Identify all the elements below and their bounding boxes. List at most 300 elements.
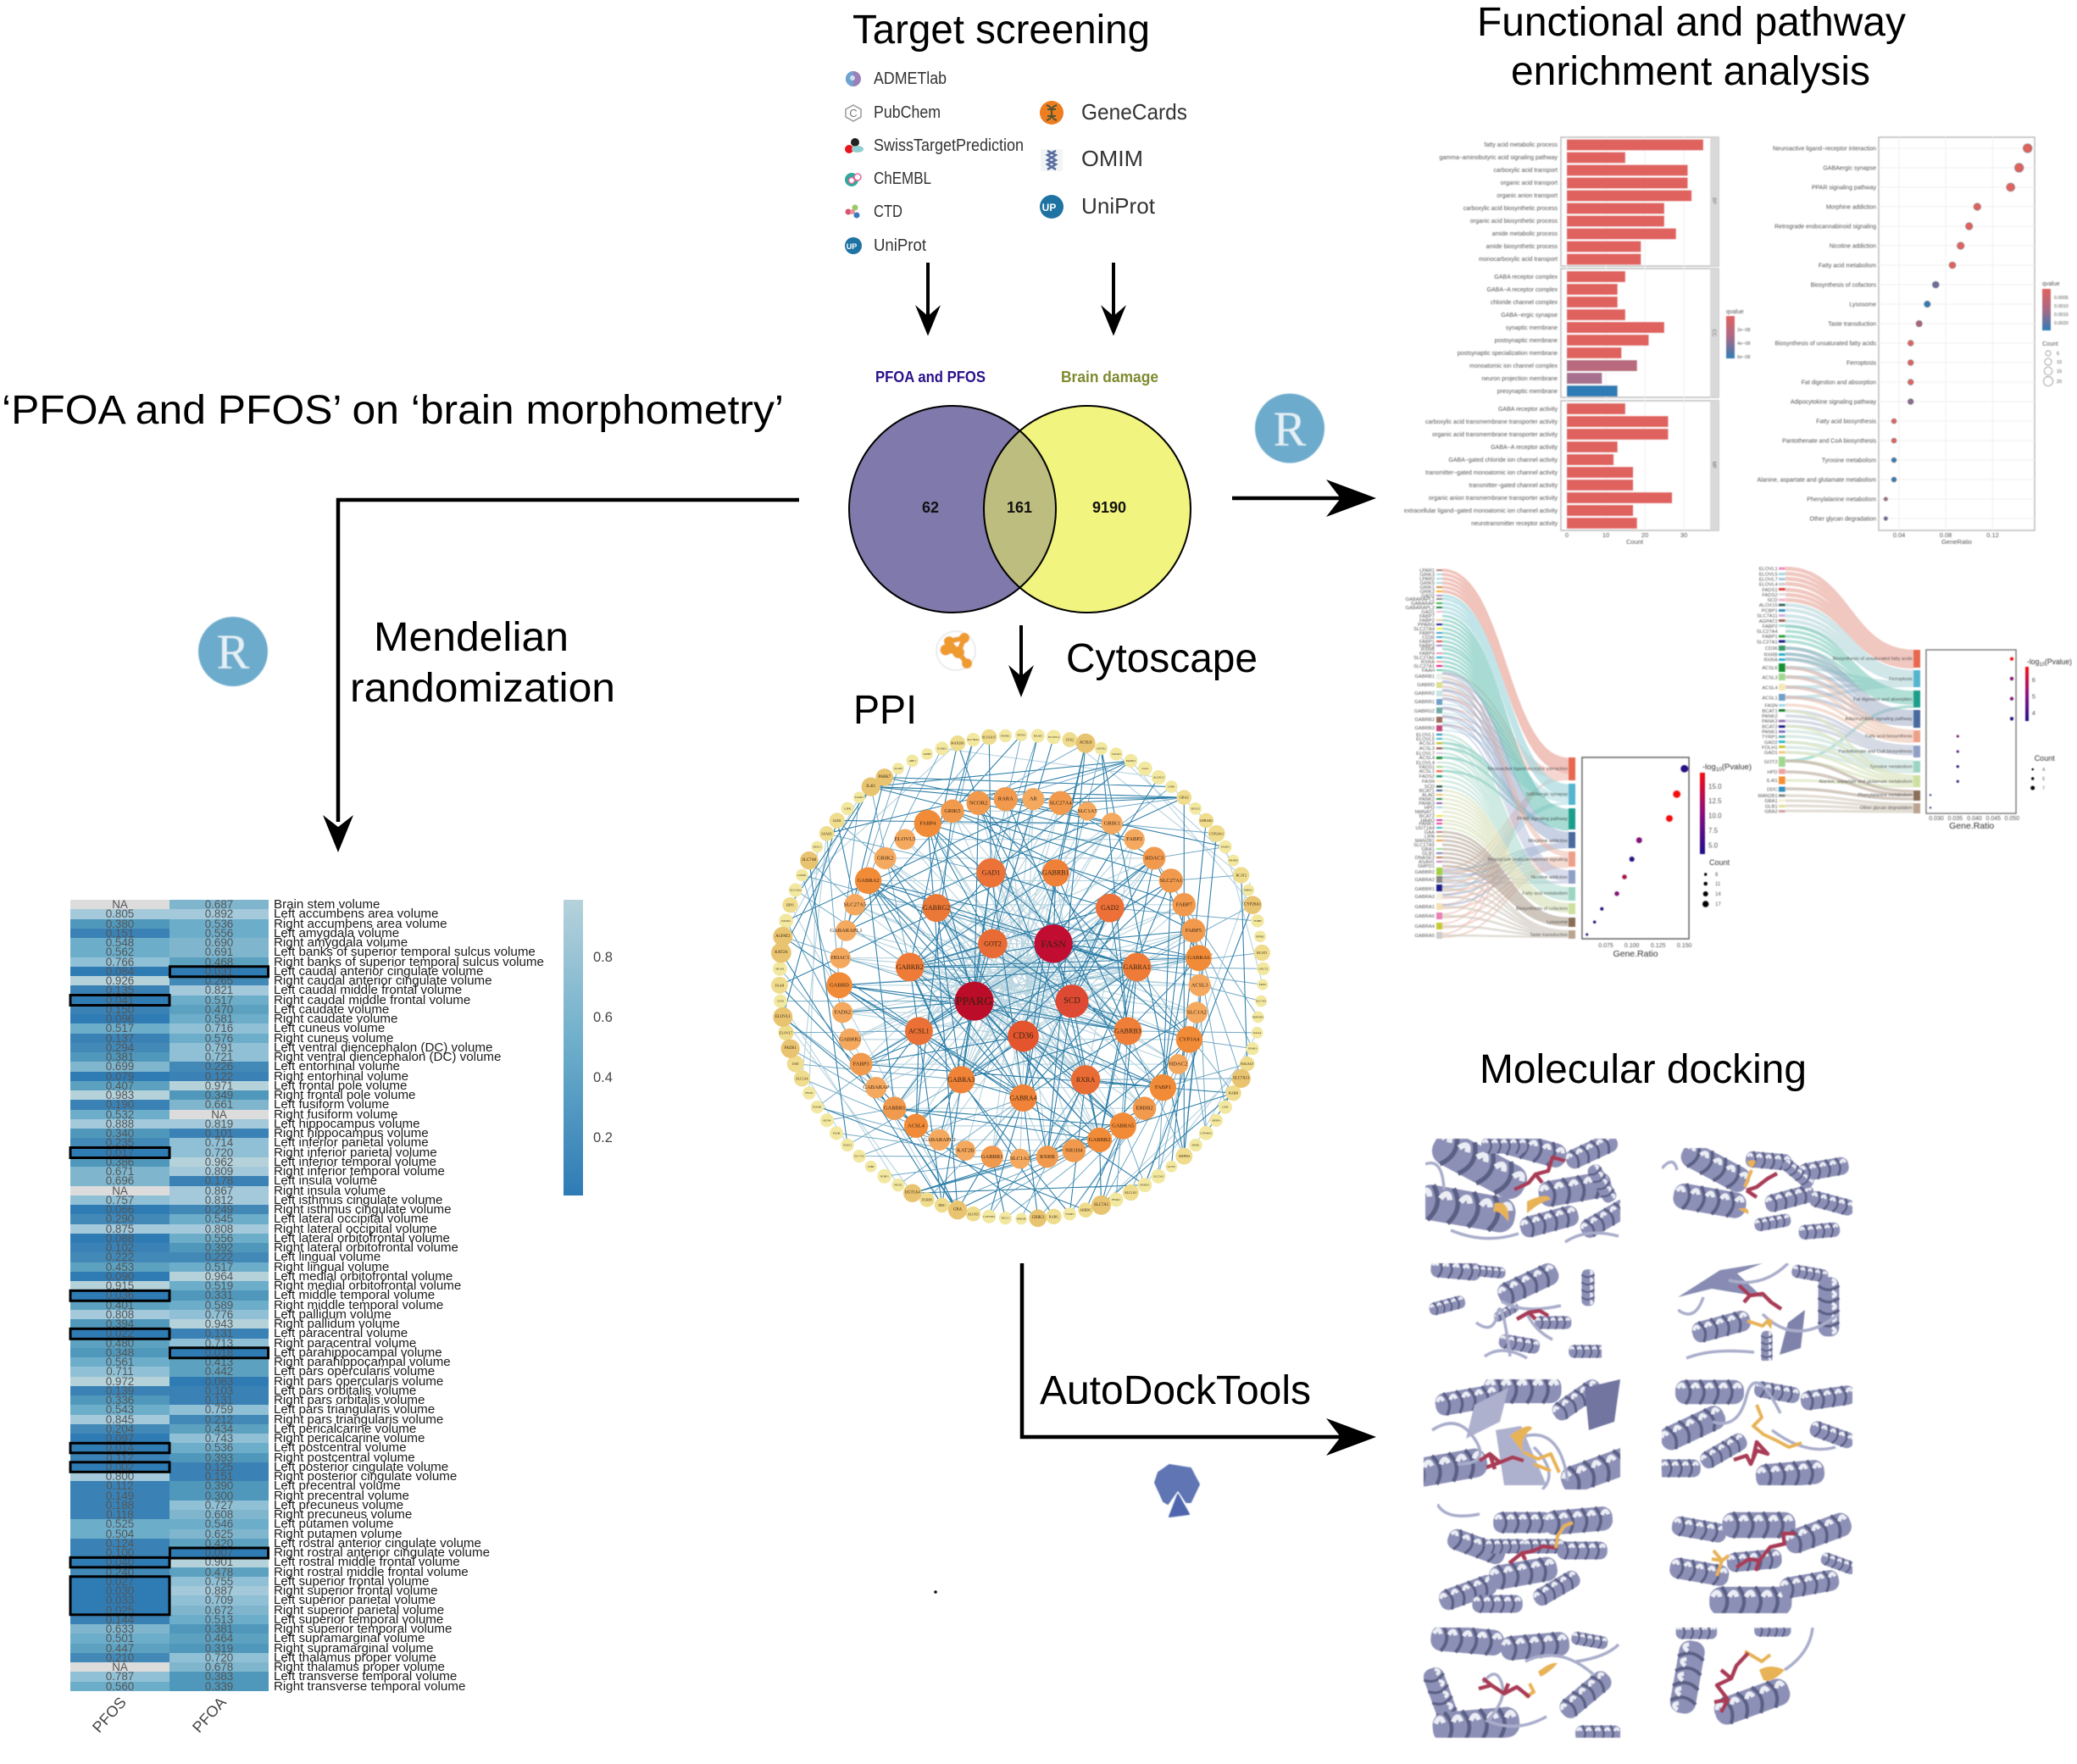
- panel: brain morphometry heatmap cells and region labels: Right medial orbitofrontal volume: [274, 1279, 461, 1293]
- sankey pathway nodes and labels: Morphine addiction: [1529, 839, 1568, 844]
- sankey gene nodes and labels: MAN2B1: [1758, 794, 1778, 799]
- panel: brain morphometry heatmap cells and region labels: 0.222: [205, 1251, 233, 1263]
- dot plot legend: -log10 Pvalue and count: 15.0: [1708, 783, 1722, 790]
- outer ring nodes small: BAAD: [1034, 734, 1042, 737]
- outer ring nodes small: PRPH2: [1229, 859, 1238, 863]
- icon: CTD: [846, 205, 859, 219]
- panel: brain morphometry heatmap cells and region labels: 0.713: [205, 1337, 233, 1349]
- venn counts: [922, 499, 1126, 516]
- panel: brain morphometry heatmap cells and region labels: Left parahippocampal volume: [274, 1345, 442, 1360]
- sankey gene nodes and labels: PANK2: [1419, 797, 1435, 802]
- sankey gene nodes and labels: GAD1: [1764, 751, 1778, 756]
- bar chart x axis: 0: [1565, 531, 1569, 539]
- panel: brain morphometry heatmap cells and region labels: Left cuneus volume: [274, 1021, 385, 1035]
- bubble chart pathway labels: Other glycan degradation: [1809, 517, 1876, 522]
- sankey pathway nodes and labels: Alanine, aspartate and glutamate metabolism: [1819, 779, 1913, 785]
- outer ring nodes large: [771, 734, 1262, 1227]
- inner ring nodes: GABRA4: [1009, 1094, 1037, 1101]
- network edges light: [780, 740, 1263, 1210]
- venn counts: 9190: [1092, 499, 1126, 516]
- dot plot legend: -log10 Pvalue and count: Count: [2035, 754, 2055, 763]
- sankey flows: [1785, 569, 1913, 812]
- bar chart category labels: organic acid biosynthetic process: [1470, 219, 1558, 225]
- sankey gene nodes and labels: HPD: [1767, 770, 1778, 775]
- panel: brain morphometry heatmap cells and region labels: 0.971: [205, 1079, 233, 1092]
- sankey gene nodes and labels: SLC27A4: [1757, 630, 1778, 635]
- sankey gene nodes and labels: NMNAT1: [1415, 810, 1435, 815]
- panel: brain morphometry heatmap cells and region labels: Left fusiform volume: [274, 1097, 389, 1112]
- bar chart category labels: organic acid transmembrane transporter activity: [1432, 432, 1558, 438]
- heading: Mendelian randomization: randomization: [350, 666, 615, 711]
- sankey gene nodes and labels: SMPD1: [1418, 864, 1435, 869]
- icon: PubChem: C: [849, 107, 858, 119]
- outer ring nodes medium: SLC1A1: [1125, 1190, 1137, 1195]
- sankey gene nodes and labels: ACSL6: [1762, 666, 1778, 671]
- bubble chart pathway labels: PPAR signaling pathway: [1812, 185, 1876, 191]
- panel: brain morphometry heatmap cells and region labels: 0.791: [205, 1041, 233, 1054]
- outer ring nodes small: OXCT2: [1258, 967, 1269, 970]
- arrow: Mendelian randomization elbow: [323, 500, 799, 852]
- dot plot legend: -log10 Pvalue and count: 10: [2039, 662, 2045, 668]
- middle ring nodes: SLC1A5: [1077, 808, 1097, 814]
- dot plot legend: -log10 Pvalue and count: 5: [2032, 693, 2035, 700]
- dot plot legend: -log10 Pvalue and count: Count: [1709, 858, 1730, 867]
- panel: KEGG enrichment bubble chart: [1758, 137, 2069, 546]
- panel: brain morphometry heatmap cells and region labels: Right precuneus volume: [274, 1507, 412, 1522]
- dot plot legend: -log10 Pvalue and count: (Pvalue): [1722, 763, 1752, 772]
- bar chart category labels: chloride channel complex: [1491, 300, 1558, 306]
- inner ring nodes: GAD2: [1101, 904, 1119, 912]
- heading: Cytoscape: Cytoscape: [1066, 636, 1258, 681]
- panel: brain morphometry heatmap cells and region labels: 0.478: [205, 1566, 233, 1578]
- dot plot legend: -log10 Pvalue and count: 5.0: [1708, 842, 1719, 849]
- panel: brain morphometry heatmap cells and region labels: 0.393: [205, 1451, 233, 1464]
- panel: brain morphometry heatmap cells and region labels: 0.226: [205, 1060, 233, 1073]
- panel: brain morphometry heatmap cells and region labels: 0.691: [205, 946, 233, 958]
- sankey gene nodes and labels: SLC27A1: [1757, 641, 1778, 646]
- panel: brain morphometry heatmap cells and region labels: Right entorhinal volume: [274, 1069, 408, 1083]
- heading: Functional and pathway enrichment analysis: enrichment analysis: [1511, 49, 1870, 94]
- outer ring nodes large: UGT1A4: [905, 1191, 920, 1195]
- panel: brain morphometry heatmap cells and region labels: Left hippocampus volume: [274, 1117, 420, 1131]
- sankey pathway nodes and labels: Fatty acid metabolism: [1522, 891, 1568, 896]
- panel: brain morphometry heatmap cells and region labels: 0.300: [205, 1489, 233, 1501]
- sankey gene nodes and labels: LPAR1: [1419, 569, 1435, 574]
- heading: PPI: PPI: [853, 688, 917, 733]
- docking image row 5 left: [1423, 1627, 1621, 1739]
- dot plot legend: -log10 Pvalue and count: 7: [2042, 786, 2045, 791]
- icon: AutoDockTools: [1155, 1465, 1199, 1517]
- panel: brain morphometry heatmap cells and region labels: 0.721: [205, 1051, 233, 1063]
- bubble chart pathway labels: [1758, 146, 1876, 522]
- outer ring nodes small: PDSS: [1259, 983, 1266, 986]
- panel: brain morphometry heatmap cells and region labels: 0.084: [106, 965, 134, 978]
- panel: brain morphometry heatmap cells and region labels: 0.381: [205, 1623, 233, 1635]
- panel: brain morphometry heatmap cells and region labels: 0.420: [205, 1537, 233, 1550]
- outer ring nodes small: ABP1: [909, 759, 916, 763]
- venn diagram: [849, 369, 1191, 613]
- panel: brain morphometry heatmap cells and region labels: 0.808: [106, 1308, 134, 1321]
- panel: brain morphometry heatmap cells and region labels: Right inferior parietal volume: [274, 1145, 437, 1159]
- outer ring nodes medium: CYP24A1: [1209, 831, 1224, 835]
- sankey gene nodes and labels: HPD: [1424, 806, 1435, 811]
- sankey pathway nodes and labels: Neuroactive ligand-receptor interaction: [1488, 767, 1568, 772]
- panel: brain morphometry heatmap cells and region labels: Left precentral volume: [274, 1478, 401, 1493]
- brain damage database list: OMIM: [1081, 146, 1143, 171]
- sankey gene nodes and labels: GABRB3: [1414, 726, 1435, 731]
- sankey gene nodes and labels: HAAO: [1421, 818, 1435, 824]
- panel: brain morphometry heatmap cells and region labels: 0.340: [106, 1127, 134, 1140]
- outer ring nodes medium: B3GALT: [1241, 1062, 1254, 1066]
- outer ring nodes medium: GLB1: [833, 818, 841, 823]
- bubbles: [1884, 144, 2032, 520]
- outer ring nodes small: CYP27B1: [983, 1215, 996, 1218]
- sankey gene nodes and labels: FADS1: [1762, 588, 1778, 593]
- dot plot: gene ratio: 0.040: [1967, 816, 1982, 822]
- panel: brain morphometry heatmap cells and region labels: 0.151: [106, 927, 134, 940]
- heatmap column label PFOS: PFOS: [89, 1694, 130, 1736]
- sankey gene nodes and labels: GLB1: [1765, 805, 1778, 810]
- sankey gene nodes and labels: CD36: [1422, 635, 1435, 641]
- panel: brain morphometry heatmap cells and region labels: 0.017: [106, 1145, 134, 1159]
- panel: brain morphometry heatmap cells and region labels: 0.755: [205, 1575, 233, 1588]
- panel: brain morphometry heatmap cells and region labels: 0.434: [205, 1423, 233, 1435]
- sankey gene nodes and labels: GABRA4: [1414, 924, 1436, 929]
- outer ring nodes small: ELOVL4: [1048, 735, 1059, 739]
- middle ring nodes: ACSL3: [1191, 982, 1208, 988]
- panel: brain morphometry heatmap cells and region labels: 0.608: [205, 1508, 233, 1521]
- outer ring nodes small: HTLP2: [1191, 807, 1200, 810]
- panel: molecular docking images: [1403, 1126, 1858, 1744]
- middle ring nodes: GRIK2: [877, 855, 893, 861]
- sankey gene nodes and labels: GABRA2: [1414, 878, 1435, 883]
- panel: brain morphometry heatmap cells and region labels: 0.805: [106, 907, 134, 920]
- panel: brain morphometry heatmap cells and region labels: 0.532: [106, 1108, 134, 1120]
- panel: brain morphometry heatmap cells and region labels: 0.122: [205, 1069, 233, 1083]
- panel: brain morphometry heatmap cells and region labels: 0.014: [106, 1441, 134, 1454]
- panel: brain morphometry heatmap cells and region labels: Left caudal middle frontal volume: [274, 983, 462, 997]
- panel: brain morphometry heatmap cells and region labels: 0.808: [205, 1222, 233, 1235]
- bar chart category labels: extracellular ligand−gated monoatomic ion channel activity: [1404, 508, 1558, 514]
- outer ring nodes medium: [771, 729, 1270, 1224]
- sankey gene nodes and labels: ACSL1: [1419, 769, 1435, 774]
- middle ring nodes: SLC27A1: [1160, 878, 1182, 884]
- sankey pathway nodes and labels: PPAR signaling pathway: [1517, 817, 1568, 822]
- bar chart category labels: organic acid transport: [1501, 180, 1558, 186]
- panel: brain morphometry heatmap cells and region labels: [70, 897, 544, 1693]
- docking image row 2 left: [1429, 1262, 1602, 1360]
- outer ring nodes small: PCBP1: [880, 1174, 889, 1178]
- middle ring nodes: GRIK5: [944, 808, 960, 814]
- sankey gene nodes and labels: GABARAPL2: [1406, 606, 1435, 611]
- outer ring nodes medium: CES2: [1066, 738, 1074, 742]
- dot plot: gene ratio: 0.100: [1624, 943, 1640, 949]
- outer ring nodes small: FFAR1: [1112, 1198, 1120, 1201]
- panel: brain morphometry heatmap cells and region labels: 0.727: [205, 1499, 233, 1512]
- panel: brain morphometry heatmap cells and region labels: 0.294: [106, 1041, 134, 1054]
- inner ring nodes: GABRB2: [897, 963, 924, 971]
- sankey gene nodes and labels: GABARAPL1: [1406, 597, 1435, 602]
- outer ring nodes small: KLRK1: [937, 746, 947, 750]
- venn label: Brain damage: Brain damage: [1061, 369, 1158, 386]
- panel: brain morphometry heatmap cells and region labels: NA: [112, 898, 128, 911]
- sankey gene nodes and labels: ELOVL1: [1759, 567, 1778, 572]
- sankey gene nodes and labels: PANK3: [1762, 719, 1778, 724]
- bar chart qvalue legend: [1726, 309, 1750, 360]
- bar chart category labels: amide metabolic process: [1492, 231, 1558, 237]
- outer ring nodes small: PANK3: [1126, 759, 1136, 763]
- bubble chart pathway labels: Biosynthesis of cofactors: [1811, 283, 1876, 288]
- panel: brain morphometry heatmap cells and region labels: Right fusiform volume: [274, 1107, 397, 1122]
- dot plot: gene ratio: 0.125: [1651, 943, 1666, 949]
- sankey pathway nodes and labels: Pantothenate and CoA biosynthesis: [1839, 749, 1913, 754]
- panel: brain morphometry heatmap cells and region labels: 0.102: [106, 1241, 134, 1254]
- sankey gene nodes and labels: FASN: [1422, 779, 1435, 785]
- outer ring nodes large: ACSL6: [1080, 741, 1092, 746]
- panel: brain morphometry heatmap cells and region labels: Right superior temporal volume: [274, 1622, 452, 1636]
- panel: brain morphometry heatmap cells and region labels: 0.560: [106, 1679, 134, 1693]
- sankey gene nodes and labels: RXRB: [1421, 647, 1435, 652]
- outer ring nodes medium: RARB: [1229, 1091, 1238, 1096]
- sankey pathway nodes and labels: [1488, 757, 1575, 939]
- sankey gene nodes and labels: ASAH1: [1419, 860, 1435, 865]
- panel: brain morphometry heatmap cells and region labels: 0.118: [106, 1508, 134, 1521]
- sankey gene nodes and labels: RXRA: [1764, 657, 1778, 663]
- panel: brain morphometry heatmap cells and region labels: 0.972: [106, 1374, 134, 1388]
- outer ring nodes medium: GPBAR1: [1200, 818, 1213, 823]
- panel: brain morphometry heatmap cells and region labels: Left supramarginal volume: [274, 1631, 425, 1645]
- middle ring nodes: GRIK1: [1104, 820, 1120, 826]
- outer ring nodes small: SLC10A2: [790, 889, 802, 892]
- panel: brain morphometry heatmap cells and region labels: 0.562: [106, 946, 134, 958]
- bar chart category labels: synaptic membrane: [1506, 325, 1558, 331]
- panel: brain morphometry heatmap cells and region labels: 0.525: [106, 1517, 134, 1530]
- bar chart category labels: organic anion transmembrane transporter activity: [1429, 496, 1558, 502]
- sankey pathway nodes and labels: Lysosome: [1547, 920, 1568, 925]
- docking image row 5 right: [1669, 1627, 1815, 1725]
- bubble chart count legend: [2042, 341, 2062, 386]
- sankey gene nodes and labels: GABRA5: [1414, 934, 1435, 939]
- panel: sankey dot plot, neuroactive pathways: [1406, 569, 1752, 959]
- panel: brain morphometry heatmap cells and region labels: Right inferior temporal volume: [274, 1164, 445, 1179]
- outer ring nodes medium: ELOVL7: [780, 1030, 792, 1035]
- panel: brain morphometry heatmap cells and region labels: Left ventral diencephalon (DC) volume: [274, 1040, 492, 1055]
- panel: brain morphometry heatmap cells and region labels: 0.519: [205, 1279, 233, 1292]
- panel: brain morphometry heatmap cells and region labels: 0.556: [205, 1232, 233, 1245]
- panel: brain morphometry heatmap cells and region labels: 0.766: [106, 956, 134, 968]
- panel: brain morphometry heatmap cells and region labels: Left frontal pole volume: [274, 1079, 407, 1093]
- sankey gene nodes and labels: RXRA: [1421, 660, 1435, 665]
- dot plot legend: -log10 Pvalue and count: 4: [2042, 768, 2045, 773]
- panel: brain morphometry heatmap cells and region labels: 0.819: [205, 1118, 233, 1130]
- panel: brain morphometry heatmap cells and region labels: 0.453: [106, 1261, 134, 1273]
- outer ring nodes medium: BCAT2: [1236, 873, 1247, 877]
- panel: brain morphometry heatmap cells and region labels: 0.392: [205, 1241, 233, 1254]
- bar chart category labels: organic anion transport: [1497, 193, 1558, 199]
- panel: brain morphometry heatmap cells and region labels: Right lateral orbitofrontal volume: [274, 1240, 458, 1255]
- compound target database list: ADMETlab: [874, 69, 947, 88]
- bubble chart x axis: 0.08: [1940, 531, 1952, 539]
- panel: brain morphometry heatmap cells and region labels: Left superior parietal volume: [274, 1593, 436, 1607]
- sankey gene nodes and labels: FOLH1: [1762, 746, 1778, 751]
- panel: brain morphometry heatmap cells and region labels: 0.101: [205, 1127, 233, 1140]
- outer ring nodes medium: FURIN: [922, 1197, 932, 1201]
- panel: brain morphometry heatmap cells and region labels: Right transverse temporal volume: [274, 1679, 465, 1693]
- docking image row 3 left: [1423, 1283, 1752, 1490]
- bars: BP: [1567, 139, 1703, 264]
- panel: brain morphometry heatmap cells and region labels: 0.188: [106, 1499, 134, 1512]
- sankey gene nodes and labels: GBA2: [1764, 810, 1778, 815]
- panel: brain morphometry heatmap cells and region labels: 0.088: [106, 1232, 134, 1245]
- panel: brain morphometry heatmap cells and region labels: 0.787: [106, 1670, 134, 1683]
- panel: brain morphometry heatmap cells and region labels: NA: [211, 1108, 227, 1120]
- outer ring nodes medium: DDC: [938, 1203, 946, 1207]
- bubble chart pathway labels: Biosynthesis of unsaturated fatty acids: [1775, 341, 1876, 347]
- outer ring nodes medium: RARG: [1049, 1214, 1058, 1218]
- middle ring nodes: FADS2: [835, 1010, 851, 1016]
- panel: brain morphometry heatmap cells and region labels: NA: [112, 1184, 128, 1196]
- panel: brain morphometry heatmap cells and region labels: 0.468: [205, 956, 233, 968]
- panel: brain morphometry heatmap cells and region labels: 0.556: [205, 927, 233, 940]
- bar chart strip labels: CC: [1711, 330, 1716, 337]
- venn counts: 62: [922, 499, 939, 516]
- panel: brain morphometry heatmap cells and region labels: Right pars triangularis volume: [274, 1412, 443, 1427]
- sankey gene nodes and labels: SCD: [1424, 785, 1435, 790]
- panel: brain morphometry heatmap cells and region labels: 0.031: [205, 965, 233, 978]
- icon: OMIM: [1041, 149, 1063, 171]
- dot plot: gene ratio: Gene.Ratio: [1613, 949, 1658, 959]
- panel: brain morphometry heatmap cells and region labels: 0.144: [106, 1613, 134, 1626]
- outer ring nodes small: HMGB: [1017, 1218, 1026, 1221]
- icon: SwissTargetPrediction: [845, 138, 864, 153]
- sankey gene nodes and labels: ELOVL7: [1416, 752, 1435, 757]
- dot plot legend: -log10 Pvalue and count: 10: [1716, 767, 1722, 773]
- sankey gene nodes and labels: FADS1: [1419, 765, 1435, 770]
- panel: brain morphometry heatmap cells and region labels: 0.543: [106, 1403, 134, 1416]
- panel: brain morphometry heatmap cells and region labels: 0.036: [106, 1289, 134, 1301]
- panel: brain morphometry heatmap cells and region labels: 0.776: [205, 1308, 233, 1321]
- arrow: right database list to venn: [1101, 263, 1126, 336]
- panel: brain morphometry heatmap cells and region labels: 0.030: [106, 1584, 134, 1597]
- panel: brain morphometry heatmap cells and region labels: Left pars orbitalis volume: [274, 1384, 416, 1398]
- outer ring nodes small: HCN2: [894, 1184, 902, 1187]
- sankey gene nodes and labels: FABP1: [1419, 640, 1435, 645]
- icon: GeneCards: [1040, 101, 1063, 125]
- heatmap significance boxes: [70, 967, 268, 1615]
- panel: brain morphometry heatmap cells and region labels: Left entorhinal volume: [274, 1059, 400, 1073]
- sankey gene nodes and labels: GRIK5: [1420, 581, 1435, 586]
- outer ring nodes large: KAT2A: [775, 951, 788, 955]
- outer ring nodes large: AGPAT2: [775, 935, 791, 939]
- dot plot: gene ratio: 0.050: [2005, 816, 2019, 822]
- dot plot legend: -log10 Pvalue and count: (Pvalue): [2045, 657, 2072, 667]
- sankey gene nodes and labels: CD36: [1765, 646, 1778, 652]
- middle ring nodes: FABP3: [853, 1062, 869, 1068]
- panel: brain morphometry heatmap cells and region labels: Left inferior temporal volume: [274, 1155, 436, 1169]
- outer ring nodes small: PRDX5: [1140, 1184, 1150, 1187]
- compound target database list: CTD: [874, 202, 902, 221]
- panel: brain morphometry heatmap cells and region labels: 0.066: [106, 1203, 134, 1216]
- panel: brain morphometry heatmap cells and region labels: 0.625: [205, 1527, 233, 1540]
- panel: brain morphometry heatmap cells and region labels: Left accumbens area volume: [274, 907, 438, 921]
- panel: brain morphometry heatmap cells and region labels: 0.348: [106, 1346, 134, 1359]
- outer ring nodes small: SLC7A5: [854, 1155, 864, 1158]
- panel: brain morphometry heatmap cells and region labels: 0.711: [106, 1365, 134, 1378]
- heading: PFOA and PFOS on brain morphometry: ‘PFOA and PFOS’ on ‘brain morphometry’: [2, 388, 784, 433]
- panel: brain morphometry heatmap cells and region labels: Right pericalcarine volume: [274, 1431, 425, 1445]
- sankey gene nodes and labels: RXRB: [1764, 652, 1778, 657]
- dot plot legend: -log10 Pvalue and count: 5: [2042, 777, 2045, 782]
- brain damage database list: GeneCards: [1081, 99, 1187, 125]
- sankey gene nodes and labels: FABP1: [1763, 635, 1778, 640]
- middle ring nodes: HDAC3: [1145, 855, 1163, 861]
- heatmap colour bar legend: 0.8: [593, 950, 613, 965]
- bubble chart x axis: 0.12: [1986, 531, 1999, 539]
- sankey gene nodes and labels: ACSL4: [1419, 756, 1436, 761]
- panel: brain morphometry heatmap cells and region labels: 0.386: [106, 1156, 134, 1168]
- dot plot legend: -log10 Pvalue and count: 14: [1715, 892, 1721, 897]
- middle ring nodes: [826, 787, 1212, 1168]
- panel: brain morphometry heatmap cells and region labels: Brain stem volume: [274, 897, 380, 912]
- outer ring nodes small: TASK1: [855, 796, 864, 799]
- sankey flows: [1442, 570, 1569, 937]
- panel: brain morphometry heatmap cells and region labels: 0.536: [205, 1441, 233, 1454]
- outer ring nodes small: LIPA: [1222, 1106, 1229, 1109]
- panel: brain morphometry heatmap cells and region labels: Left middle temporal volume: [274, 1288, 435, 1302]
- outer ring nodes small: SPNS2: [1017, 734, 1025, 737]
- sankey pathway nodes and labels: Retrograde endocannabinoid signaling: [1488, 857, 1568, 863]
- panel: brain morphometry heatmap cells and region labels: 0.517: [205, 1261, 233, 1273]
- middle ring nodes: GABRA2: [858, 878, 880, 884]
- panel: brain morphometry heatmap cells and region labels: 0.290: [106, 1212, 134, 1225]
- bar chart category labels: gamma−aminobutyric acid signaling pathway: [1439, 155, 1558, 161]
- panel: brain morphometry heatmap cells and region labels: Right superior frontal volume: [274, 1584, 438, 1598]
- heading: Mendelian randomization: [350, 615, 615, 711]
- dot plot: gene ratio: [1926, 650, 2019, 831]
- panel: brain morphometry heatmap cells and region labels: 0.112: [106, 1479, 134, 1492]
- outer ring nodes large: FADS1: [784, 1046, 797, 1051]
- middle ring nodes: ERBB2: [1136, 1106, 1153, 1112]
- panel: brain morphometry heatmap cells and region labels: Left thalamus proper volume: [274, 1650, 436, 1665]
- inner ring nodes: GABRG2: [923, 904, 950, 912]
- middle ring nodes: CYP3A4: [1179, 1036, 1200, 1042]
- heading: Molecular docking: Molecular docking: [1480, 1047, 1807, 1092]
- outer ring nodes small: IMPA1: [1244, 889, 1252, 892]
- sankey gene nodes and labels: GABRB1: [1414, 674, 1435, 680]
- bar chart category labels: fatty acid metabolic process: [1485, 142, 1558, 148]
- icon: ADMETlab: [846, 71, 861, 86]
- panel: brain morphometry heatmap cells and region labels: 0.545: [205, 1212, 233, 1225]
- sankey gene nodes and labels: SLC27A5: [1413, 656, 1435, 661]
- panel: brain morphometry heatmap cells and region labels: 0.633: [106, 1623, 134, 1635]
- panel: brain morphometry heatmap cells and region labels: 0.210: [106, 1651, 134, 1664]
- middle ring nodes: KAT2B: [957, 1148, 975, 1154]
- outer ring nodes small: SLC5A3: [1153, 1174, 1163, 1178]
- outer ring nodes small: TACR3: [1112, 752, 1121, 756]
- icon: R logo left: R: [217, 624, 250, 680]
- bar chart qvalue legend: 4e−08: [1737, 341, 1750, 347]
- middle ring nodes: FABP7: [1176, 901, 1193, 907]
- outer ring nodes small: TUBB: [1253, 919, 1262, 923]
- panel: brain morphometry heatmap cells and region labels: 0.407: [106, 1079, 134, 1092]
- panel: brain morphometry heatmap cells and region labels: Left paracentral volume: [274, 1326, 408, 1340]
- panel: brain morphometry heatmap cells and region labels: Left pallidum volume: [274, 1307, 392, 1322]
- bubble chart pathway labels: Fatty acid metabolism: [1819, 263, 1876, 269]
- network edges medium: [780, 735, 1263, 1219]
- panel: brain morphometry heatmap cells and region labels: Left transverse temporal volume: [274, 1669, 457, 1684]
- panel: brain morphometry heatmap cells and region labels: Left isthmus cingulate volume: [274, 1193, 442, 1207]
- sankey gene nodes and labels: GABRB2: [1414, 718, 1435, 723]
